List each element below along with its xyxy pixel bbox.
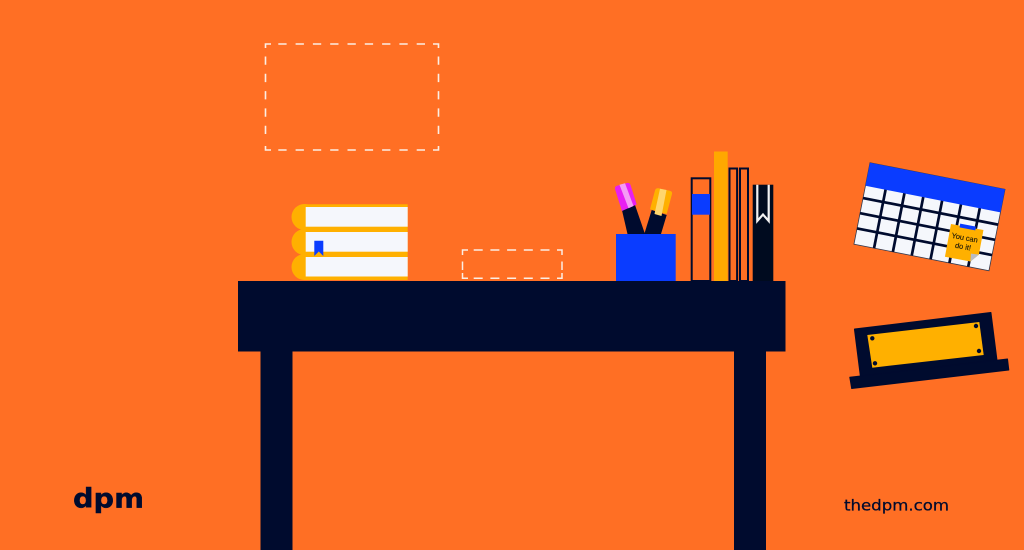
plaque screws: [870, 324, 981, 365]
plaque base: [850, 359, 1009, 388]
calendar sheet: [854, 163, 1005, 271]
yellow marker: [644, 188, 672, 234]
dashed placeholder: wall frame: [266, 44, 438, 150]
sticky paper: [945, 224, 983, 263]
plaque plate: [867, 322, 984, 368]
thin outlined book two: [740, 168, 748, 281]
dashed placeholder: desk item: [462, 250, 562, 278]
desk: [238, 281, 786, 550]
middle book: [292, 229, 408, 255]
sticky text: You can: [951, 231, 979, 245]
desk right leg: [734, 351, 766, 550]
dark book with ribbon: [753, 185, 773, 281]
stack of books: [292, 204, 408, 280]
sticky note: [945, 222, 984, 263]
sticky fold: [970, 253, 979, 263]
website url: thedpm.com: [844, 496, 949, 514]
bottom book: [292, 254, 408, 280]
magenta marker: [615, 183, 645, 234]
upright books: [692, 152, 773, 281]
thin outlined book one: [730, 168, 737, 281]
calendar header: [865, 163, 1005, 212]
cup: [616, 234, 676, 281]
name plaque: [850, 313, 1009, 388]
sticky text: do it!: [954, 241, 972, 252]
sticky tape: [960, 224, 976, 230]
desk top: [238, 281, 786, 352]
desk left leg: [260, 351, 292, 550]
top book: [292, 204, 408, 230]
plaque back: [855, 313, 997, 377]
pen cup with markers: [615, 183, 676, 281]
calendar grid: [854, 185, 1001, 271]
calendar: [854, 163, 1005, 271]
logo: dpm: [73, 484, 144, 514]
yellow book: [714, 152, 728, 281]
outlined book with blue band: [692, 178, 710, 281]
bookmark: [314, 241, 323, 256]
